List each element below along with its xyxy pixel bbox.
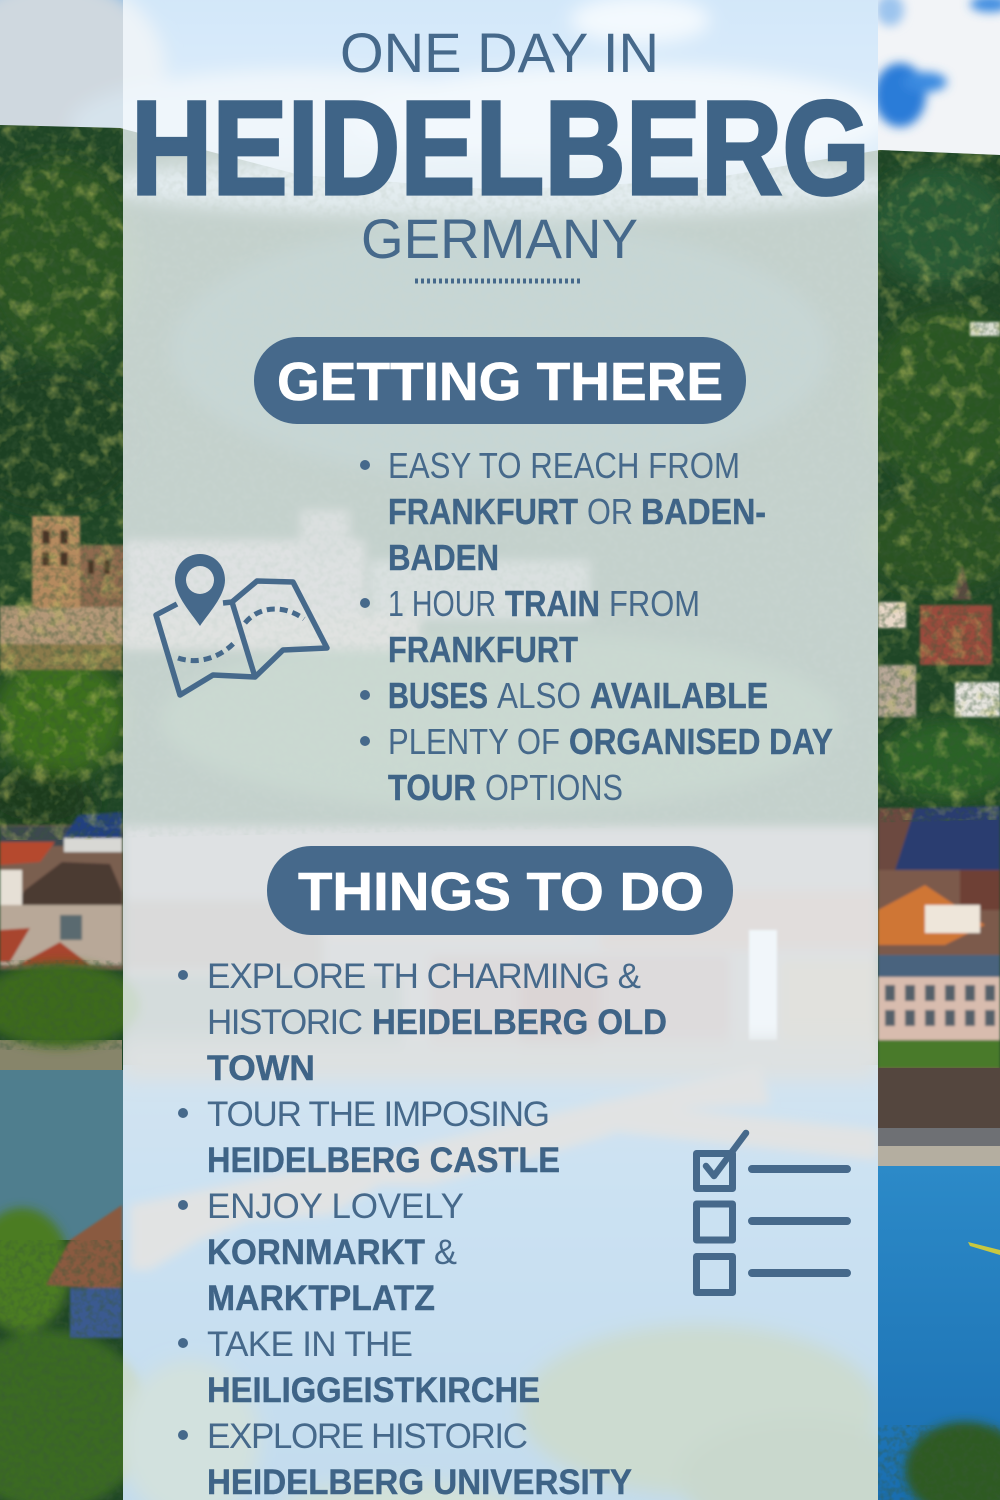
title: Heidelberg: HEIDELBERG [131, 74, 870, 223]
section heading: getting there [254, 337, 746, 424]
things to do list: TOWN [207, 1049, 315, 1088]
getting there list: AVAILABLE [590, 675, 768, 716]
getting there list: PLENTY OF [388, 721, 560, 762]
things to do list: EXPLORE TH CHARMING & [207, 957, 641, 996]
getting there list: FROM [609, 583, 700, 624]
things to do list: TAKE IN THE [207, 1325, 413, 1364]
icon: map with location pin [156, 554, 327, 695]
river and quay [0, 1040, 1000, 1500]
old town buildings [0, 806, 1000, 1070]
icon: checklist [696, 1133, 847, 1292]
section heading: getting there: GETTING THERE [277, 352, 723, 412]
getting there list: BADEN- [641, 491, 766, 532]
getting there list: 1 HOUR [388, 583, 496, 624]
castle ghost behind panel [120, 510, 590, 650]
cloud and blue patch upper right [874, 0, 1000, 160]
things to do list: KORNMARKT [207, 1233, 425, 1272]
getting there list: TOUR [388, 767, 476, 808]
getting there list [360, 445, 833, 808]
translucent central panel [123, 0, 878, 1500]
getting there list: FRANKFURT [388, 629, 578, 670]
forest hillside [0, 125, 1000, 840]
subtitle: Germany: GERMANY [361, 207, 638, 270]
things to do list: HEILIGGEISTKIRCHE [207, 1371, 540, 1410]
haze over hill crest behind panel [100, 153, 900, 217]
things to do list [178, 957, 667, 1500]
things to do list: EXPLORE HISTORIC [207, 1417, 528, 1456]
title: one day in: ONE DAY IN [340, 21, 659, 84]
old bridge [130, 1065, 878, 1270]
dotted divider [415, 278, 580, 284]
trees ghost behind panel [120, 1325, 920, 1500]
getting there list: BADEN [388, 537, 499, 578]
things to do list: HISTORIC [207, 1003, 363, 1042]
getting there list: OPTIONS [485, 767, 623, 808]
getting there list: BUSES [388, 675, 488, 716]
getting there list: TRAIN [505, 583, 600, 624]
getting there list: FRANKFURT [388, 491, 578, 532]
things to do list: HEIDELBERG CASTLE [207, 1141, 560, 1180]
getting there list: OR [587, 491, 633, 532]
things to do list: MARKTPLATZ [207, 1279, 435, 1318]
castle [0, 516, 125, 670]
section heading: things to do: THINGS TO DO [298, 862, 704, 922]
things to do list: ENJOY LOVELY [207, 1187, 464, 1226]
getting there list: EASY TO REACH FROM [388, 445, 740, 486]
getting there list: ALSO [497, 675, 581, 716]
things to do list: HEIDELBERG OLD [372, 1003, 667, 1042]
things to do list: TOUR THE IMPOSING [207, 1095, 550, 1134]
section heading: things to do [267, 846, 733, 935]
old town ghost behind panel [123, 826, 880, 1070]
hillside houses right [878, 322, 1000, 717]
foreground trees [0, 963, 1000, 1500]
things to do list: & [434, 1233, 457, 1272]
getting there list: ORGANISED DAY [569, 721, 833, 762]
